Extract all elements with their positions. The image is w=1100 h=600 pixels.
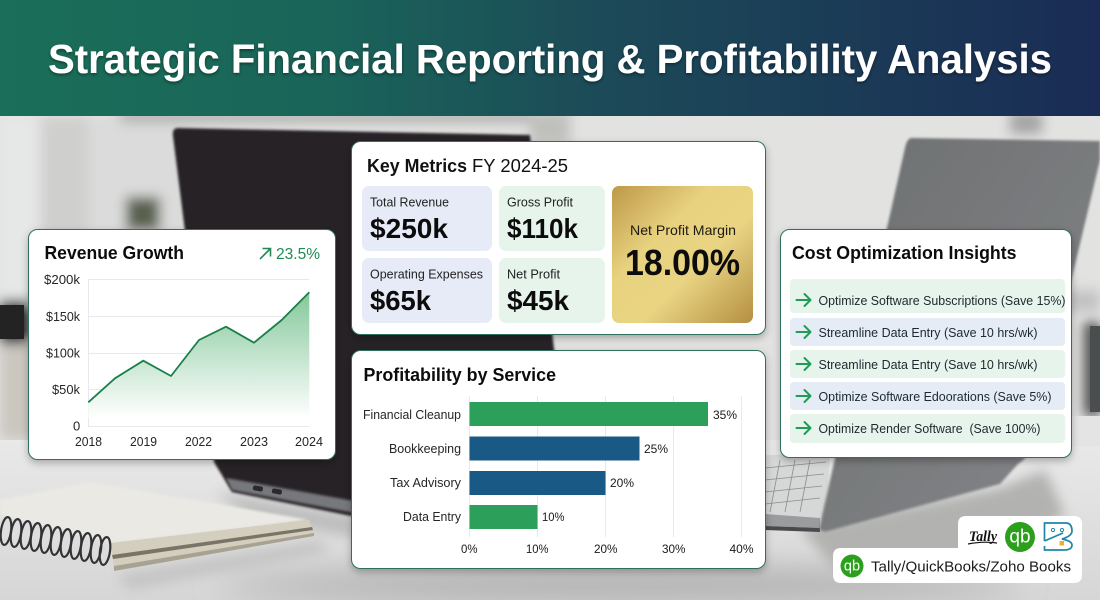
panel: revenue growth [28,230,336,460]
bar chart: profitability [363,396,754,556]
right laptop [765,138,1100,532]
metric: gross profit: Gross Profit [507,196,574,210]
insight row 4 [790,382,1065,410]
logo: QuickBooks: qb [1009,526,1031,548]
metric: net profit: Net Profit [507,268,561,282]
line chart: revenue 2018-2024: 0 [73,418,80,434]
line chart: revenue 2018-2024: 2018 [75,434,102,449]
heading: key metrics FY 2024-25: FY 2024-25 [472,156,568,176]
insight row 3 [790,350,1065,378]
insight row 1 [790,279,1066,313]
line chart: revenue 2018-2024: $100k [46,346,80,360]
logo: QuickBooks [1005,522,1035,552]
title banner: Strategic Financial Reporting & Profitability Analysis [48,36,1052,82]
insight row 2 [790,318,1065,346]
metric: total revenue [362,186,492,251]
bar chart: profitability: Data Entry [403,509,461,524]
panel: cost optimization insights [780,230,1072,458]
insight row 3: Streamline Data Entry (Save 10 hrs/wk) [818,358,1038,372]
bar chart: profitability: 40% [730,542,754,556]
metric: net profit margin: Net Profit Margin [630,222,736,238]
bar chart: profitability: 35% [713,408,737,422]
notebook [0,482,314,571]
bar chart: profitability: Tax Advisory [390,475,461,490]
bar chart: profitability: 10% [526,542,549,556]
line chart: revenue 2018-2024: $150k [46,309,80,324]
logo: Zoho Books [1044,523,1072,550]
metric: operating expenses [362,258,492,323]
logo: QuickBooks small [840,554,864,578]
bar chart: profitability: 25% [644,442,668,456]
heading: key metrics FY 2024-25 [367,156,568,176]
bar chart: profitability: Financial Cleanup [363,407,461,422]
metric: total revenue: $250k [370,213,448,244]
bar chart: profitability: 30% [662,542,686,556]
left laptop [173,128,700,516]
line chart: revenue 2018-2024: 2019 [130,434,157,449]
bar chart: profitability: 0% [461,542,478,556]
metric: net profit margin [612,186,753,323]
growth indicator 23.5%: 23.5% [276,246,320,263]
line chart: revenue 2018-2024: $200k [44,272,81,287]
metric: gross profit [499,186,605,251]
metric: total revenue: Total Revenue [370,196,449,210]
bar chart: profitability: 20% [594,542,618,556]
metric: operating expenses: $65k [370,285,431,316]
panel: software logos [833,516,1082,583]
bar chart: profitability: 10% [542,510,565,524]
insight row 2: Streamline Data Entry (Save 10 hrs/wk) [818,326,1038,340]
title banner [0,0,1100,116]
metric: net profit [499,258,605,323]
bar chart: profitability: 20% [610,476,634,490]
heading: cost optimization insights: Cost Optimization Insights [792,242,1016,263]
insight row 4: Optimize Software Edoorations (Save 5%) [818,390,1052,404]
heading: profitability by service: Profitability by Service [364,364,556,385]
label: accounting software: Tally/QuickBooks/Zoho Books [871,558,1071,576]
panel: key metrics [352,142,766,334]
insight row 5: Optimize Render Software (Save 100%) [818,422,1040,436]
heading: revenue growth: Revenue Growth [44,242,184,263]
logo: Tally: Tally [969,529,997,545]
bar chart: profitability: Bookkeeping [389,441,461,456]
heading: key metrics FY 2024-25: Key Metrics [367,156,467,176]
line chart: revenue 2018-2024: 2022 [185,434,212,449]
line chart: revenue 2018-2024: 2024 [295,434,323,449]
insight row 5 [790,414,1065,443]
insight row 1: Optimize Software Subscriptions (Save 15%) [818,294,1066,308]
metric: operating expenses: Operating Expenses [370,268,483,282]
metric: net profit: $45k [507,285,569,316]
metric: gross profit: $110k [507,213,578,244]
line chart: revenue 2018-2024: $50k [52,382,80,397]
line chart: revenue 2018-2024 [44,272,323,449]
metric: net profit margin: 18.00% [625,242,740,283]
logo: QuickBooks small: qb [844,558,860,574]
panel: profitability by service [352,350,766,568]
line chart: revenue 2018-2024: 2023 [240,434,268,449]
